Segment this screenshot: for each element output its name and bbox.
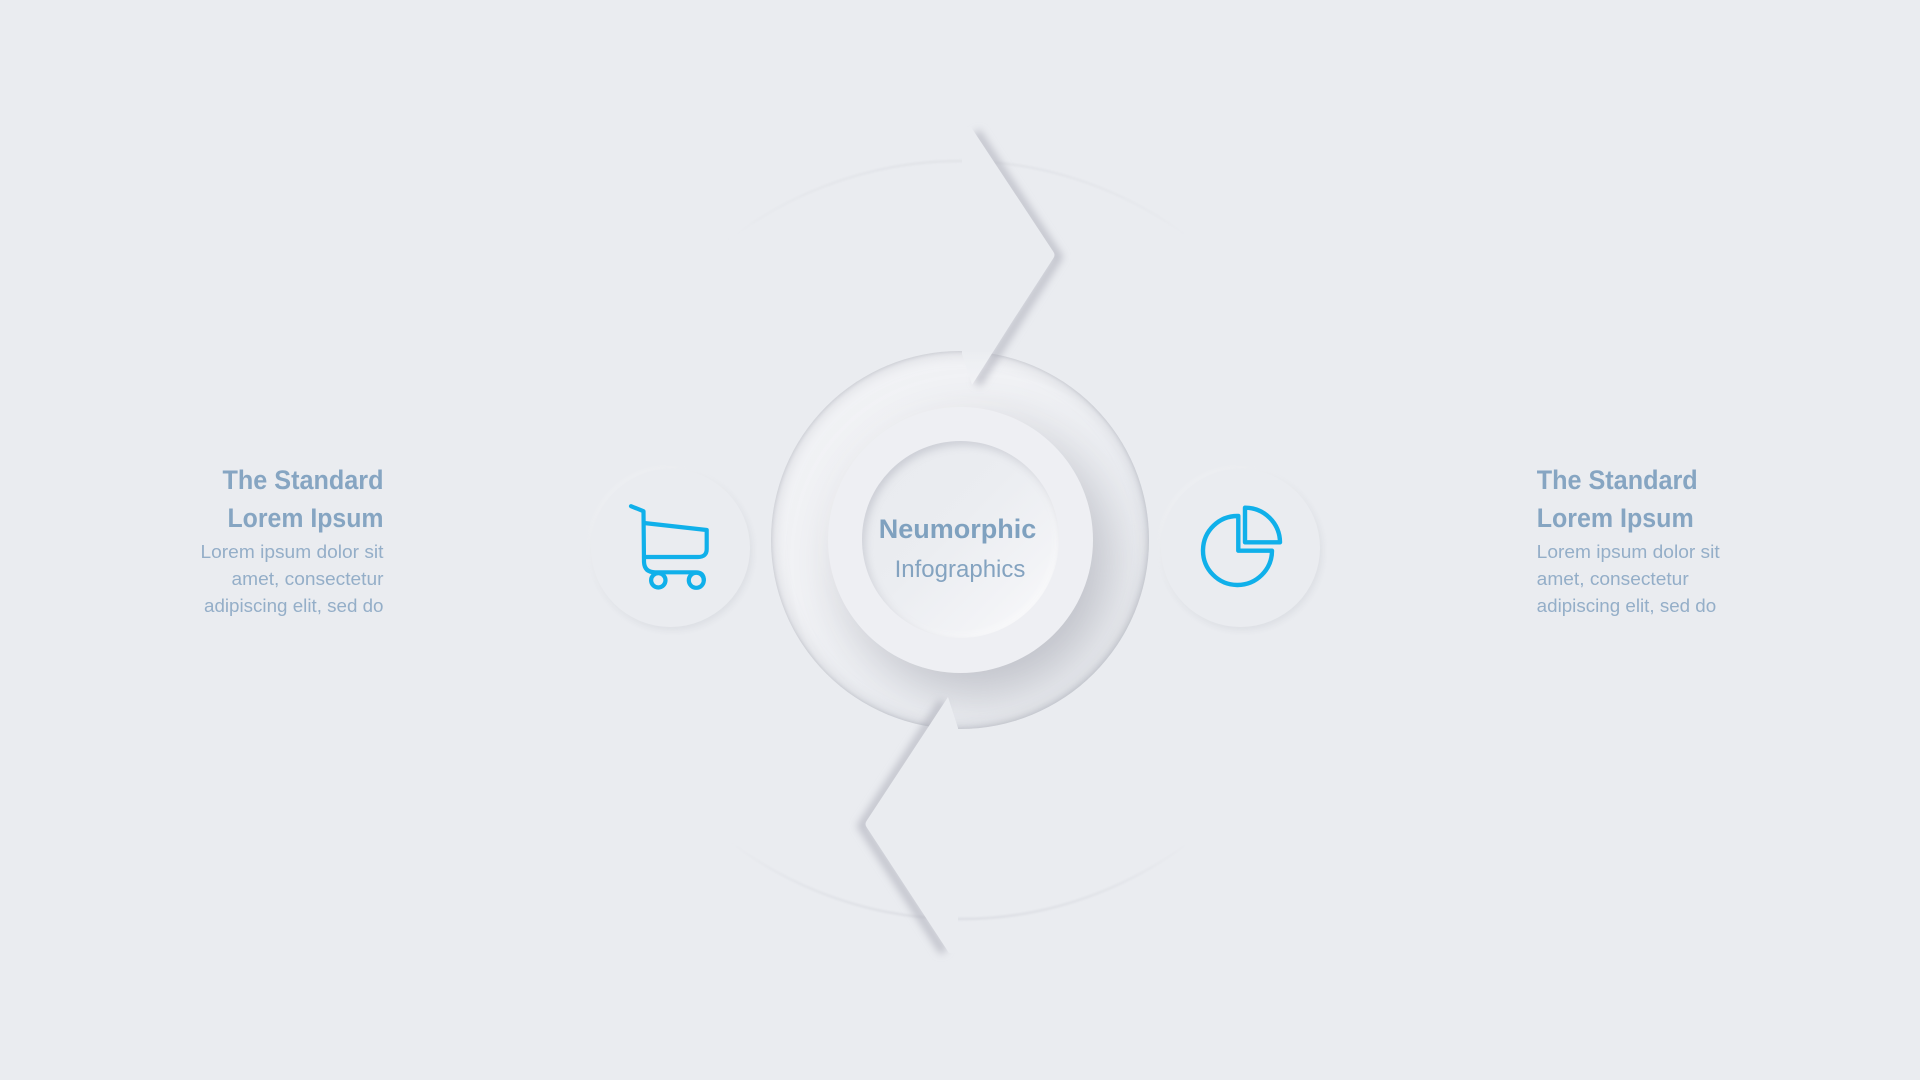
right heading: Lorem Ipsum	[1537, 503, 1694, 533]
left body text: adipiscing elit, sed do	[204, 595, 384, 616]
right icon badge	[1161, 469, 1320, 627]
right body text: Lorem ipsum dolor sit	[1537, 541, 1720, 562]
right body text: adipiscing elit, sed do	[1537, 595, 1716, 616]
left body text: Lorem ipsum dolor sit	[200, 541, 384, 562]
left body text	[200, 541, 384, 616]
icon: shopping cart	[631, 506, 707, 588]
right body text: amet, consectetur	[1537, 568, 1689, 589]
right text block	[1537, 465, 1720, 616]
left heading: The Standard	[222, 465, 384, 495]
central neumorphic ring	[771, 351, 1149, 729]
large outer orbit ring arcs	[702, 161, 1218, 919]
right body text	[1537, 541, 1720, 616]
left icon badge	[591, 469, 750, 627]
right heading	[1537, 465, 1698, 533]
right heading: The Standard	[1537, 465, 1698, 495]
left body text: amet, consectetur	[232, 568, 384, 589]
center title: Infographics	[895, 556, 1025, 583]
raised middle disc	[828, 407, 1093, 673]
left text block	[200, 465, 384, 616]
left heading: Lorem Ipsum	[228, 503, 384, 533]
bottom chevron arrow	[862, 697, 958, 953]
inset core disc	[862, 441, 1059, 638]
top chevron arrow	[962, 127, 1058, 385]
icon: pie chart	[1203, 508, 1280, 585]
center title: Neumorphic	[879, 514, 1036, 544]
center title	[879, 514, 1036, 583]
left heading	[222, 465, 384, 533]
